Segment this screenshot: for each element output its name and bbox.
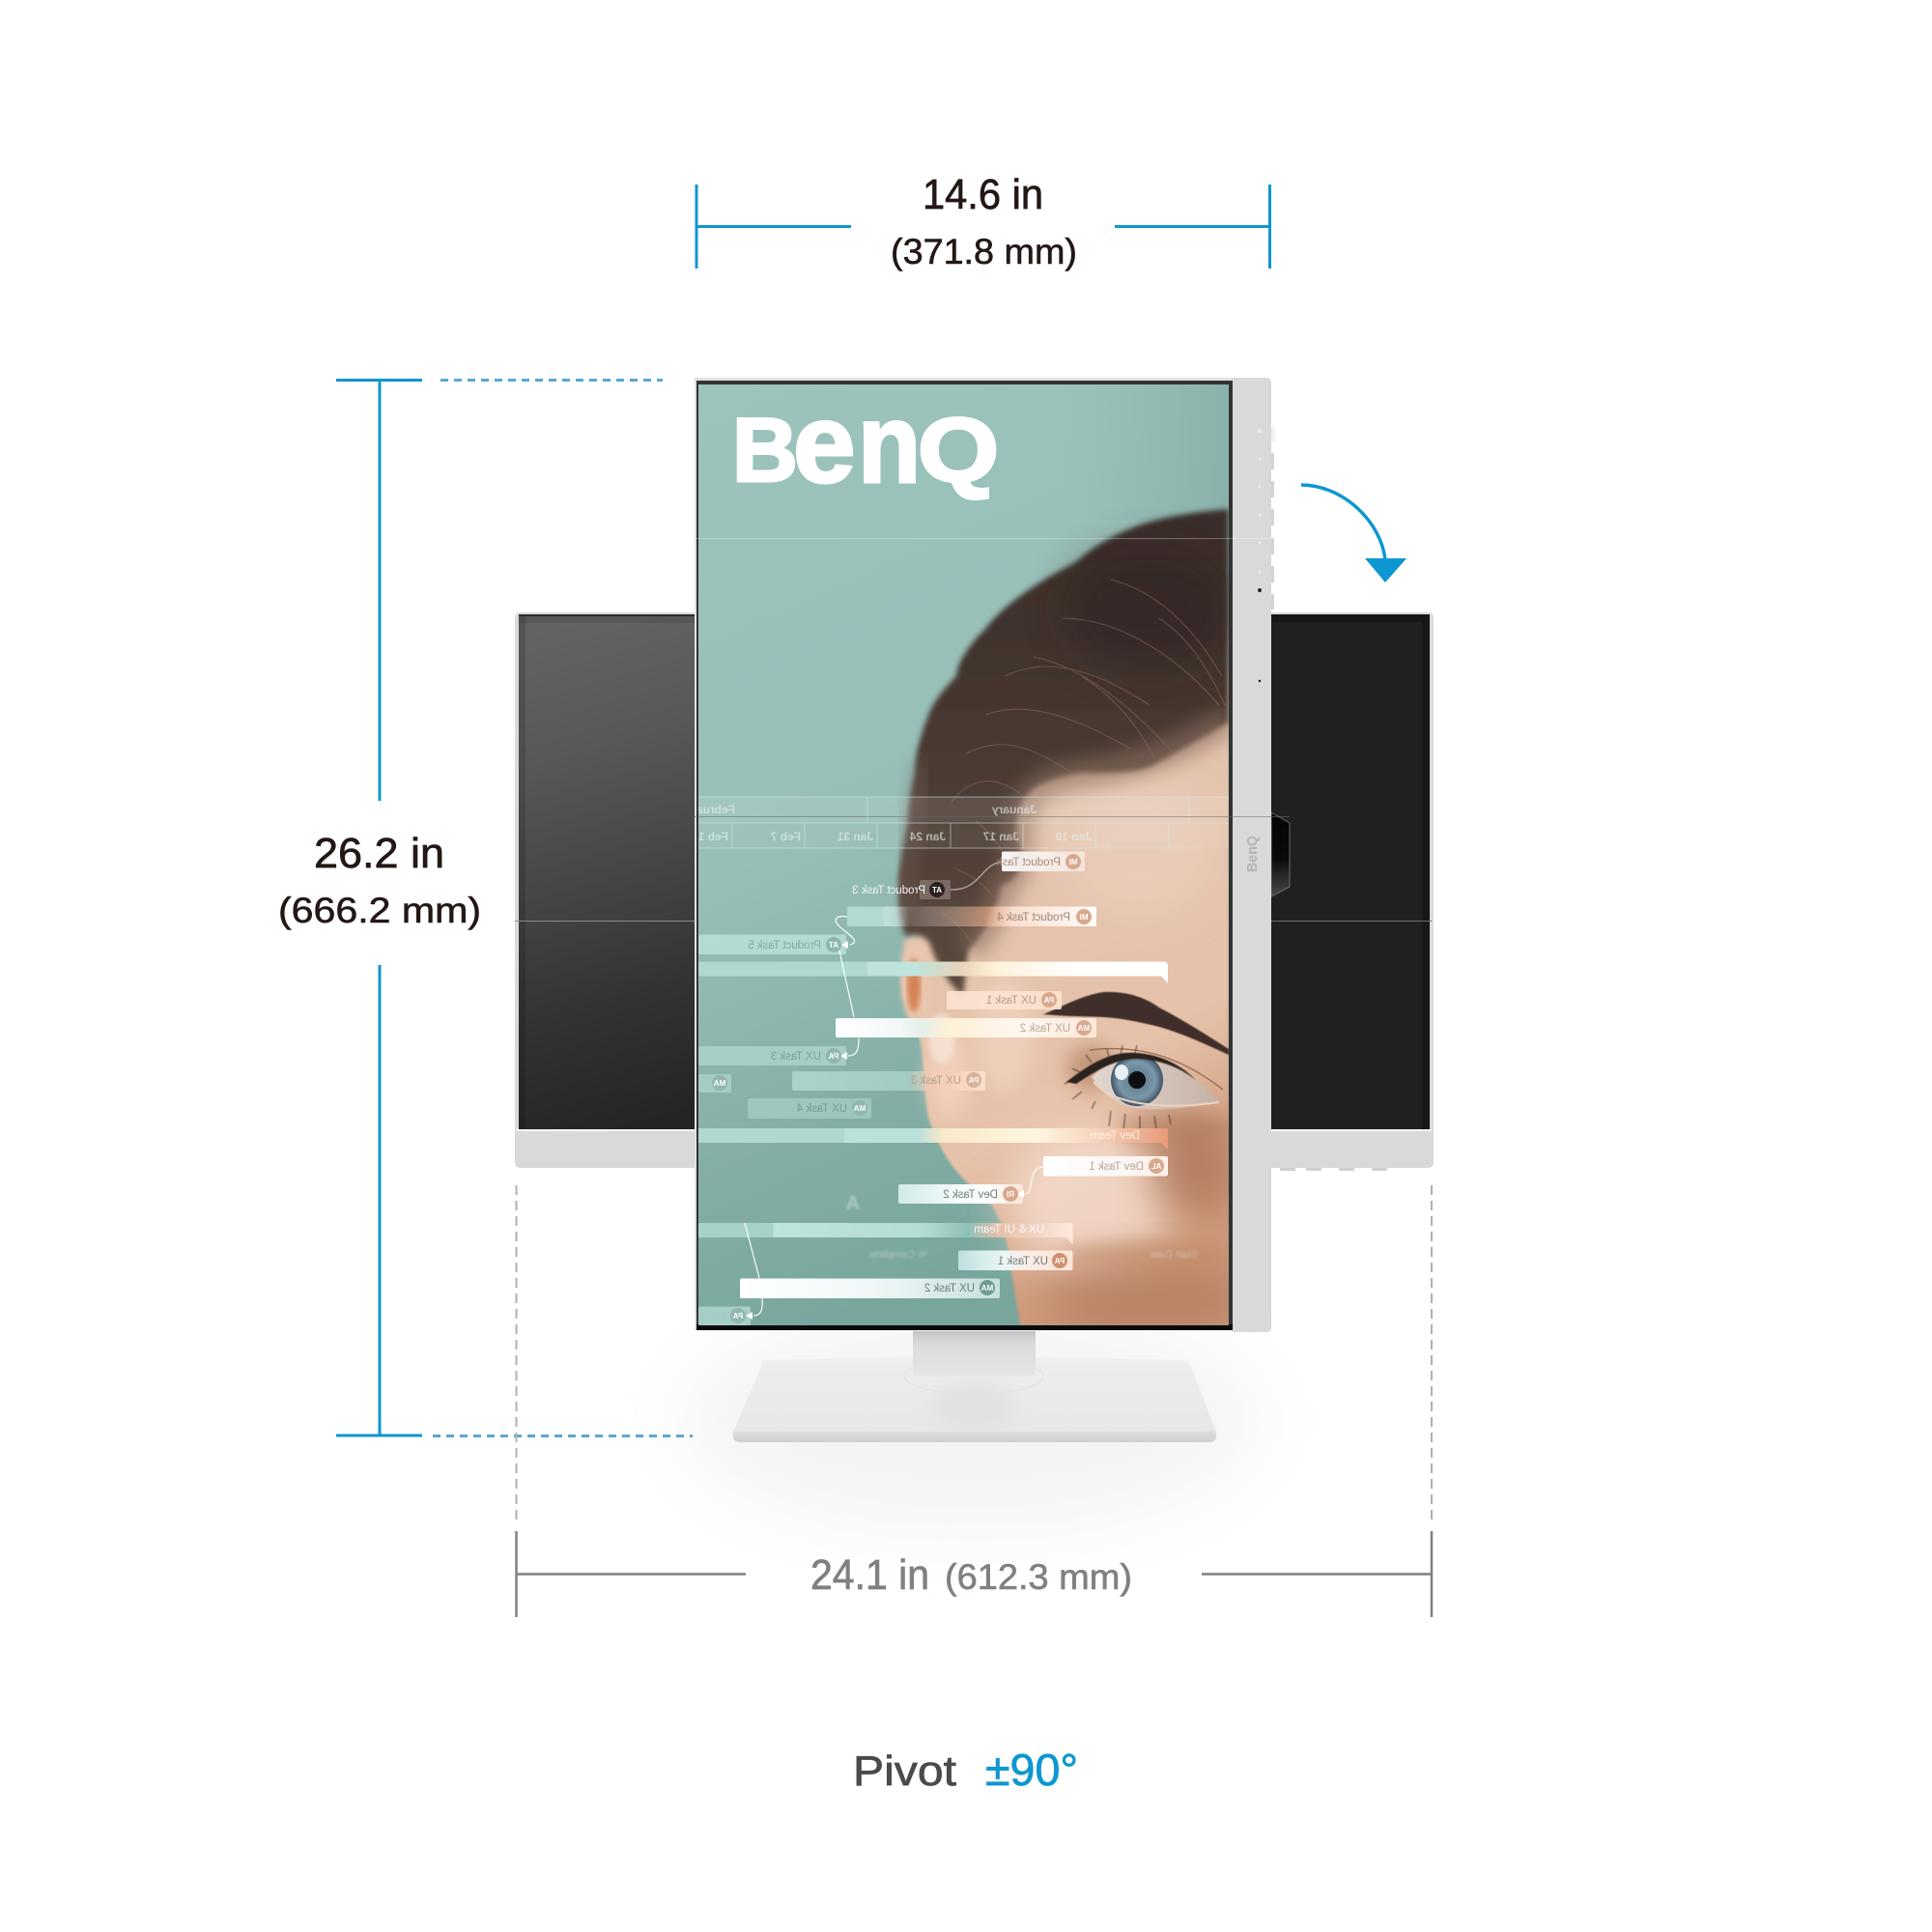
gantt chart avatar initials: MI [1069, 858, 1077, 867]
gantt chart task labels, mirrored: UX Task 2 [924, 1283, 975, 1294]
illustration and dimension drawing [280, 178, 1434, 1786]
width dimension: 14.6 in: (371.8 mm) [891, 232, 1077, 271]
pivot label: ±90° [985, 1745, 1078, 1795]
gantt chart task labels, mirrored: UX Task 4 [796, 1103, 847, 1115]
gantt chart header: Jan 17 [982, 830, 1019, 843]
gantt chart task labels, mirrored: Product Task 3 [852, 885, 925, 896]
gantt chart avatar initials: MI [1080, 913, 1088, 922]
gantt chart task labels, mirrored: Product Task [996, 857, 1061, 868]
BenQ logo on screen [732, 381, 999, 506]
right rear monitor in landscape [1256, 612, 1434, 1171]
gantt chart task labels, mirrored [748, 857, 1144, 1292]
gantt chart avatar initials: PA [733, 1312, 743, 1321]
gantt chart task labels, mirrored: UX Task [666, 1078, 707, 1090]
pivot label: Pivot [853, 1747, 956, 1795]
gantt chart connectors [745, 862, 1043, 1316]
gantt chart header: Jan 31 [837, 830, 873, 843]
monitor frame [695, 378, 1236, 1330]
gantt chart task labels, mirrored: UX Task [684, 1311, 725, 1322]
ear [897, 935, 920, 1018]
depth dimension: 24.1 in: (612.3 mm) [945, 1557, 1132, 1597]
connector arrowheads [746, 941, 1024, 1320]
stand neck [913, 1331, 1036, 1377]
blurred toolbar row on screen: A [846, 1193, 860, 1214]
gantt chart task labels, mirrored: UX Task 3 [911, 1075, 961, 1087]
gantt chart task labels, mirrored: UX Task 2 [1020, 1023, 1070, 1035]
gantt chart header: January [992, 803, 1037, 816]
pivoted monitor in portrait [666, 378, 1290, 1343]
height dimension: 26.2 in: (666.2 mm) [278, 891, 481, 930]
pivot label [853, 1745, 1078, 1795]
gantt chart header: Jan 24 [909, 830, 946, 843]
BenQ logo on screen: B [732, 399, 798, 500]
gantt chart task labels, mirrored: Dev Team [1090, 1130, 1140, 1142]
side bezel brand mark: BenQ [1244, 836, 1261, 872]
teal background [698, 384, 1229, 1325]
stand [733, 1331, 1216, 1442]
BenQ logo on screen: Q [918, 399, 999, 500]
gantt chart task labels, mirrored: UX Task 1 [986, 995, 1037, 1007]
stand mount seen behind the pivoted panel [1271, 812, 1290, 896]
depth dimension: 24.1 in [516, 1185, 1432, 1617]
face: hair [898, 509, 1232, 995]
face: eye [1065, 1044, 1232, 1146]
gantt chart avatar initials: PA [829, 1052, 838, 1061]
gantt chart task bars [698, 852, 1168, 1325]
screen: portrait photo with mirrored gantt chart [698, 384, 1229, 1325]
left rear monitor in landscape [515, 612, 708, 1168]
gantt chart avatars [712, 854, 1164, 1323]
side buttons [1271, 427, 1275, 610]
blurred toolbar row on screen: % Complete [869, 1249, 927, 1261]
BenQ logo on screen: e [793, 381, 856, 506]
gantt chart avatar initials: PA [969, 1076, 979, 1085]
gantt chart task labels, mirrored: Dev Task 2 [943, 1189, 998, 1201]
blurred toolbar row on screen: Duration [964, 1249, 1005, 1261]
gantt chart header: Feb 14 [692, 830, 728, 843]
width dimension: 14.6 in [696, 171, 1269, 271]
gantt chart avatar initials: PA [1044, 996, 1054, 1005]
gantt chart avatar initials: MA [714, 1079, 725, 1088]
blurred toolbar row on screen [846, 1193, 1198, 1261]
BenQ logo on screen: n [858, 381, 921, 506]
gantt chart avatar initials: MA [1078, 1024, 1090, 1033]
gantt chart avatar initials: RI [1007, 1190, 1014, 1199]
face: skin [900, 628, 1256, 1343]
gantt chart avatar initials: MA [854, 1104, 866, 1113]
height dimension: 26.2 in [278, 381, 693, 1435]
gantt chart avatar initials: AL [1151, 1162, 1161, 1171]
button markers [1258, 429, 1262, 574]
stand base [733, 1357, 1216, 1442]
width dimension: 14.6 in: 14.6 in [923, 171, 1043, 218]
blurred toolbar row on screen: Start Date [1150, 1249, 1198, 1261]
gantt chart task labels, mirrored: Product Task 4 [997, 912, 1070, 923]
gantt chart task labels, mirrored: UX Task 3 [771, 1051, 821, 1063]
gantt chart header: Feb 7 [770, 830, 801, 843]
gantt chart header [685, 797, 1229, 848]
height dimension: 26.2 in: 26.2 in [314, 830, 444, 877]
gantt chart task labels, mirrored: UX Task 1 [998, 1256, 1048, 1267]
gantt chart task labels, mirrored: Product Task 5 [748, 940, 821, 952]
gantt chart avatar initials: MA [981, 1284, 993, 1293]
face: eyebrow [1043, 992, 1229, 1055]
gantt chart avatar initials: AT [932, 886, 942, 895]
month and date labels are mirrored as on the reference screen: February [685, 803, 735, 816]
gantt chart task labels, mirrored: Dev Task 1 [1089, 1161, 1144, 1173]
gantt chart avatar initials: PA [1055, 1257, 1065, 1265]
gantt chart task labels, mirrored: UX & UI Team [974, 1224, 1044, 1236]
monitor side bezel [695, 378, 1290, 1332]
infographic canvas [280, 178, 1434, 1786]
gantt chart header: Jan 10 [1055, 830, 1092, 843]
floor shadow under the stand [681, 1309, 1261, 1531]
gantt chart avatar initials [714, 858, 1161, 1321]
depth dimension: 24.1 in: 24.1 in [810, 1551, 929, 1599]
gantt chart avatar initials: AT [829, 941, 838, 950]
pivot rotation arrow [1301, 485, 1406, 582]
